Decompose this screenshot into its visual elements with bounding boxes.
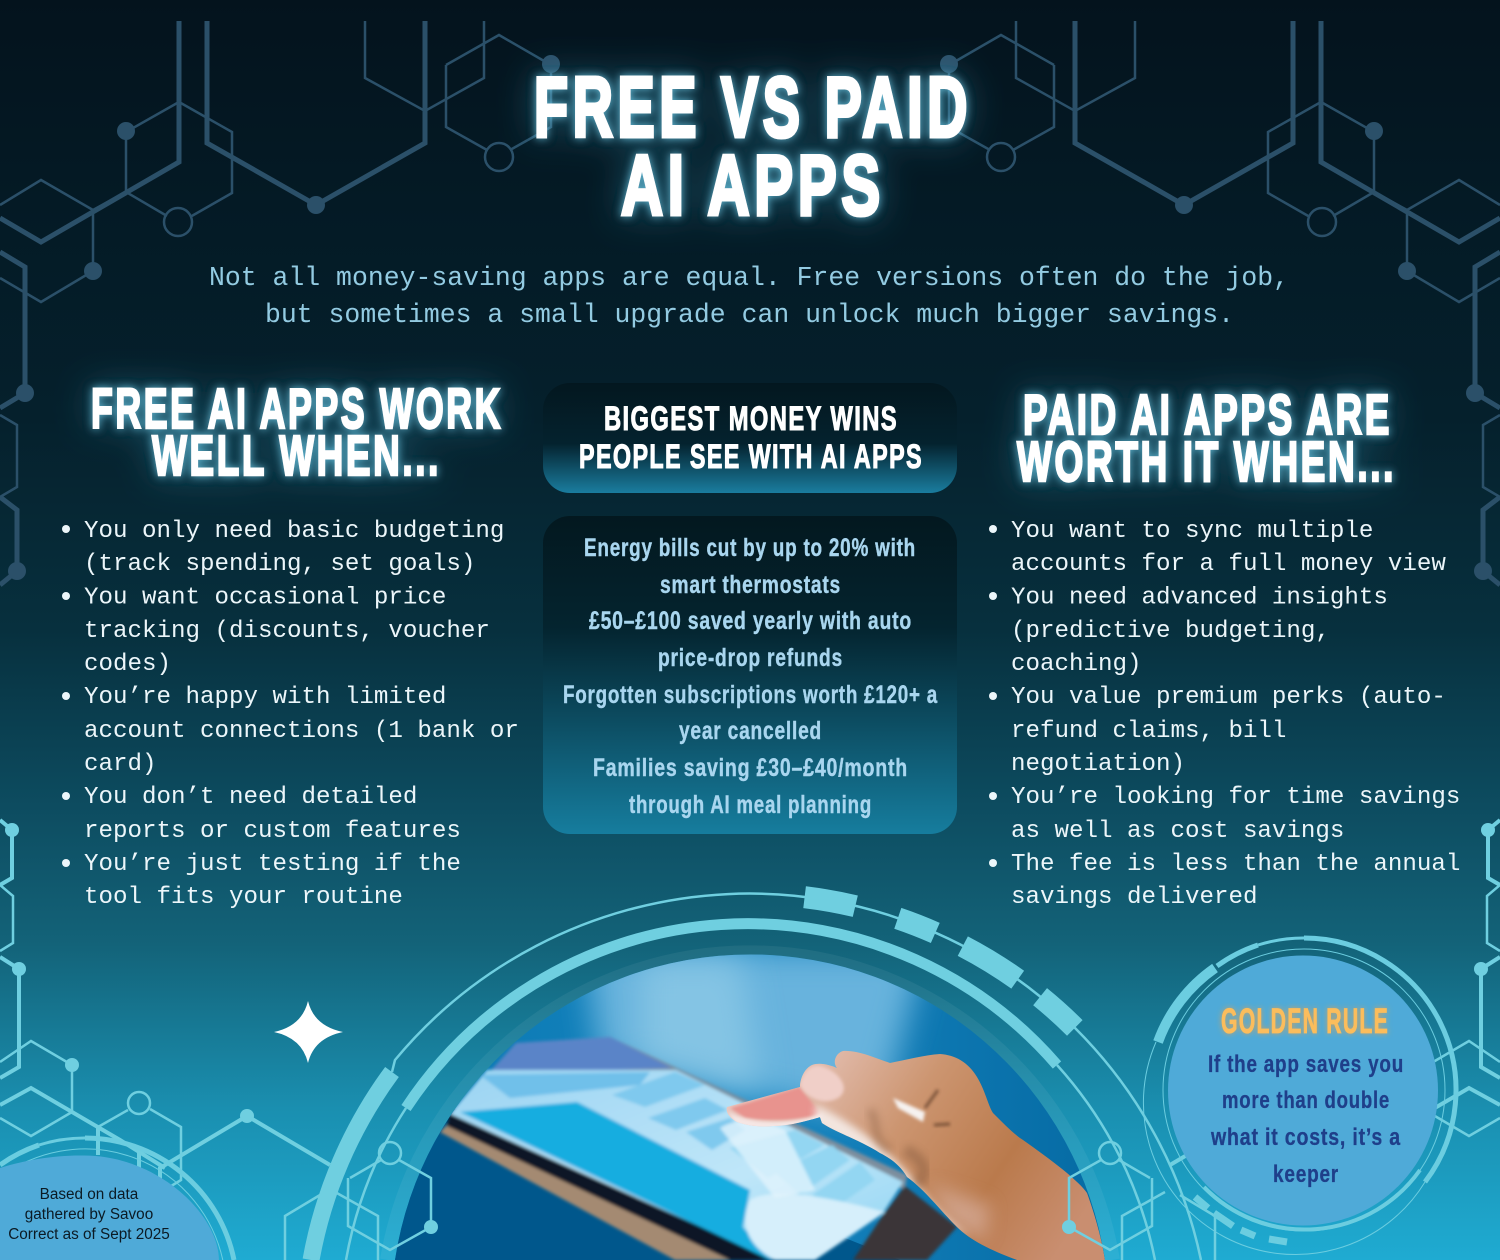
callout: golden rule: what it costs, it’s a bbox=[1210, 1124, 1401, 1151]
arcs around photo bbox=[311, 894, 1201, 1260]
panel: biggest money wins heading bbox=[543, 383, 957, 493]
source note badge bbox=[0, 1138, 234, 1260]
list: paid apps bbox=[989, 518, 1460, 911]
heading: free apps bbox=[91, 377, 503, 488]
list: free apps: You want occasional price bbox=[84, 584, 446, 612]
heading: paid apps bbox=[1017, 383, 1396, 494]
list: paid apps: You want to sync multiple bbox=[1011, 518, 1373, 545]
list: paid apps: accounts for a full money view bbox=[1011, 551, 1446, 578]
list: paid apps: (predictive budgeting, bbox=[1011, 618, 1330, 645]
tablet bbox=[440, 1037, 957, 1260]
panel: money wins list bbox=[543, 516, 957, 834]
source note badge: Based on data bbox=[40, 1186, 139, 1203]
panel: money wins list: Energy bills cut by up to 20% with bbox=[584, 534, 916, 562]
panel: money wins list: £50–£100 saved yearly with auto bbox=[589, 607, 912, 635]
panel: money wins list: Families saving £30–£40/month bbox=[593, 754, 908, 782]
list: free apps: You’re just testing if the bbox=[84, 851, 461, 878]
panel: biggest money wins heading: PEOPLE SEE WITH AI APPS bbox=[579, 438, 923, 476]
list: free apps: reports or custom features bbox=[84, 818, 461, 845]
hand bbox=[720, 1045, 1110, 1260]
list: paid apps: You value premium perks (auto- bbox=[1011, 684, 1446, 711]
source note badge: gathered by Savoo bbox=[25, 1206, 153, 1223]
panel: biggest money wins heading: BIGGEST MONEY WINS bbox=[604, 400, 898, 438]
title bbox=[534, 60, 972, 234]
list: paid apps: as well as cost savings bbox=[1011, 818, 1344, 845]
list: free apps: codes) bbox=[84, 651, 171, 678]
panel: money wins list: year cancelled bbox=[679, 717, 822, 745]
list: paid apps: coaching) bbox=[1011, 651, 1141, 678]
panel: money wins list: price-drop refunds bbox=[658, 644, 843, 672]
list: paid apps: You’re looking for time savings bbox=[1011, 784, 1460, 811]
title: FREE VS PAID bbox=[534, 60, 972, 156]
list: free apps: You don’t need detailed bbox=[84, 784, 417, 811]
callout: golden rule: more than double bbox=[1222, 1087, 1390, 1114]
subtitle bbox=[209, 263, 1289, 330]
panel: money wins list: through AI meal planning bbox=[629, 791, 872, 819]
list: free apps: You only need basic budgeting bbox=[84, 518, 504, 545]
list: paid apps: The fee is less than the annual bbox=[1011, 851, 1460, 878]
callout: golden rule bbox=[1143, 938, 1456, 1255]
list: free apps: (track spending, set goals) bbox=[84, 551, 475, 578]
list: paid apps: refund claims, bill bbox=[1011, 718, 1286, 745]
list: free apps: tracking (discounts, voucher bbox=[84, 618, 490, 645]
list: paid apps: negotiation) bbox=[1011, 751, 1185, 778]
callout: golden rule: If the app saves you bbox=[1208, 1051, 1404, 1078]
main circular photo: hand on tablet bbox=[388, 950, 1112, 1260]
icon: sparkle bbox=[274, 1001, 343, 1063]
title: AI APPS bbox=[621, 138, 885, 234]
circuit lines: lower bbox=[0, 820, 1500, 1260]
circuit lines: upper bbox=[0, 21, 1500, 585]
subtitle: Not all money-saving apps are equal. Free versions often do the job, bbox=[209, 263, 1289, 293]
list: free apps: You’re happy with limited bbox=[84, 684, 446, 711]
list: free apps bbox=[62, 518, 519, 911]
callout: golden rule: GOLDEN RULE bbox=[1221, 1002, 1389, 1041]
subtitle: but sometimes a small upgrade can unlock much bigger savings. bbox=[265, 300, 1234, 330]
list: free apps: card) bbox=[84, 751, 156, 778]
list: paid apps: savings delivered bbox=[1011, 884, 1257, 911]
panel: money wins list: Forgotten subscriptions worth £120+ a bbox=[563, 681, 938, 709]
list: free apps: account connections (1 bank or bbox=[84, 718, 519, 745]
list: free apps: tool fits your routine bbox=[84, 884, 403, 911]
panel: money wins list: smart thermostats bbox=[660, 571, 841, 599]
callout: golden rule: keeper bbox=[1273, 1161, 1339, 1188]
heading: free apps: FREE AI APPS WORK bbox=[91, 377, 503, 441]
list: paid apps: You need advanced insights bbox=[1011, 584, 1388, 612]
source note badge: Correct as of Sept 2025 bbox=[8, 1226, 170, 1243]
heading: free apps: WELL WHEN... bbox=[152, 424, 441, 488]
